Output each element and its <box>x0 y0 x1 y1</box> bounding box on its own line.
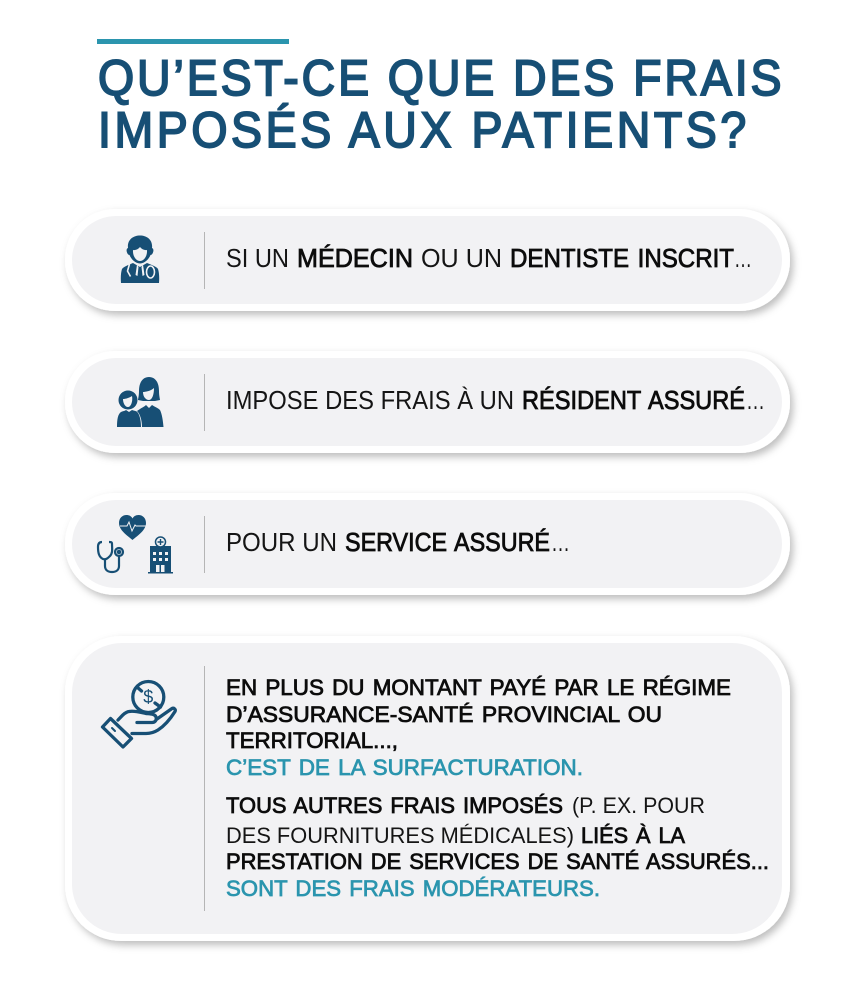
icon: doctor <box>121 236 159 283</box>
icon: hand holding coin: $ <box>143 687 153 707</box>
icon: hospital <box>148 537 173 574</box>
text: condition 1: … <box>734 245 752 273</box>
text: condition 1: SI UN <box>226 245 289 273</box>
text: frais modérateurs: LIÉS À LA <box>581 823 685 848</box>
icon: stethoscope <box>98 542 123 572</box>
title: QU’EST-CE QUE DES FRAIS <box>98 50 782 106</box>
panel: résident assuré <box>65 351 790 453</box>
title: IMPOSÉS AUX PATIENTS? <box>98 102 746 158</box>
icon: family <box>117 377 164 427</box>
text: condition 2 <box>226 386 765 415</box>
text: condition 1: DENTISTE INSCRIT <box>510 245 734 273</box>
text: frais modérateurs: DES FOURNITURES MÉDICALES) <box>226 823 574 848</box>
panel: service assuré <box>65 493 790 595</box>
panel: médecin ou dentiste <box>65 209 790 311</box>
text: surfacturation: TERRITORIAL..., <box>226 728 398 753</box>
text: condition 2: RÉSIDENT ASSURÉ <box>522 386 745 415</box>
text: condition 3: … <box>551 529 570 557</box>
text: frais modérateurs: PRESTATION DE SERVICES DE SANTÉ ASSURÉS... <box>226 849 769 874</box>
text: surfacturation: D’ASSURANCE-SANTÉ PROVINCIAL OU <box>226 702 662 727</box>
text: frais modérateurs <box>226 793 769 901</box>
icon: hand holding coin <box>102 682 175 747</box>
title <box>98 50 782 158</box>
text: condition 3 <box>226 528 570 557</box>
text: condition 1 <box>226 244 752 273</box>
text: condition 2: IMPOSE DES FRAIS À UN <box>226 386 514 415</box>
text: condition 1: MÉDECIN <box>297 244 413 273</box>
text: frais modérateurs: TOUS AUTRES FRAIS IMPOSÉS <box>226 793 563 818</box>
text: condition 3: SERVICE ASSURÉ <box>345 528 550 557</box>
text: condition 3: POUR UN <box>226 529 337 557</box>
text: surfacturation: C’EST DE LA SURFACTURATION. <box>226 755 583 780</box>
text: condition 1: OU UN <box>421 245 502 273</box>
title accent bar <box>97 39 289 44</box>
text: condition 2: … <box>746 387 765 415</box>
icon: heart <box>119 515 146 540</box>
panel: surfacturation et frais modérateurs <box>65 636 790 941</box>
text: surfacturation <box>226 675 731 780</box>
text: frais modérateurs: SONT DES FRAIS MODÉRATEURS. <box>226 876 600 901</box>
text: frais modérateurs: (P. EX. POUR <box>572 793 705 818</box>
text: surfacturation: EN PLUS DU MONTANT PAYÉ PAR LE RÉGIME <box>226 675 731 700</box>
